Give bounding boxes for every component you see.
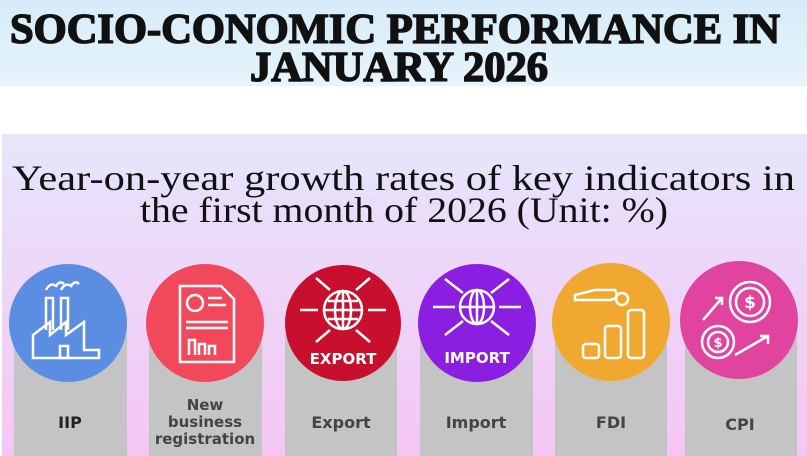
card: FDI <box>552 263 670 456</box>
icon: report document <box>180 286 234 362</box>
card: Import: Import <box>446 413 507 432</box>
card: Export <box>285 265 401 456</box>
subtitle: the first month of 2026 (Unit: %) <box>140 190 668 230</box>
icon: hand with coin stacks <box>575 290 644 358</box>
title <box>10 7 780 91</box>
card: IIP: IIP <box>58 413 82 432</box>
header band <box>0 0 807 86</box>
card: CPI: CPI <box>725 415 755 434</box>
card: CPI: $ <box>744 293 756 313</box>
icon: coins with rising arrows <box>702 282 770 358</box>
subtitle <box>12 158 795 230</box>
icon: globe with inward arrows <box>433 279 521 335</box>
icon: factory <box>33 282 99 358</box>
card: Export: Export <box>311 413 371 432</box>
card: FDI: FDI <box>596 413 626 432</box>
card: New business registration: registration <box>155 430 255 448</box>
card: Import <box>418 264 536 456</box>
card: IIP <box>9 264 127 456</box>
card: Import: IMPORT <box>444 349 510 367</box>
card: CPI: $ <box>713 336 723 351</box>
card: New business registration: business <box>168 413 242 431</box>
icon: globe with outward arrows <box>300 278 386 342</box>
card: Export: EXPORT <box>310 350 377 368</box>
title: JANUARY 2026 <box>250 45 548 91</box>
subtitle: Year-on-year growth rates of key indicators in <box>12 158 795 198</box>
title: SOCIO-CONOMIC PERFORMANCE IN <box>10 7 780 53</box>
card: CPI <box>680 261 798 456</box>
card: New business registration <box>146 264 264 456</box>
main panel <box>2 134 807 456</box>
card: New business registration: New <box>187 396 223 414</box>
